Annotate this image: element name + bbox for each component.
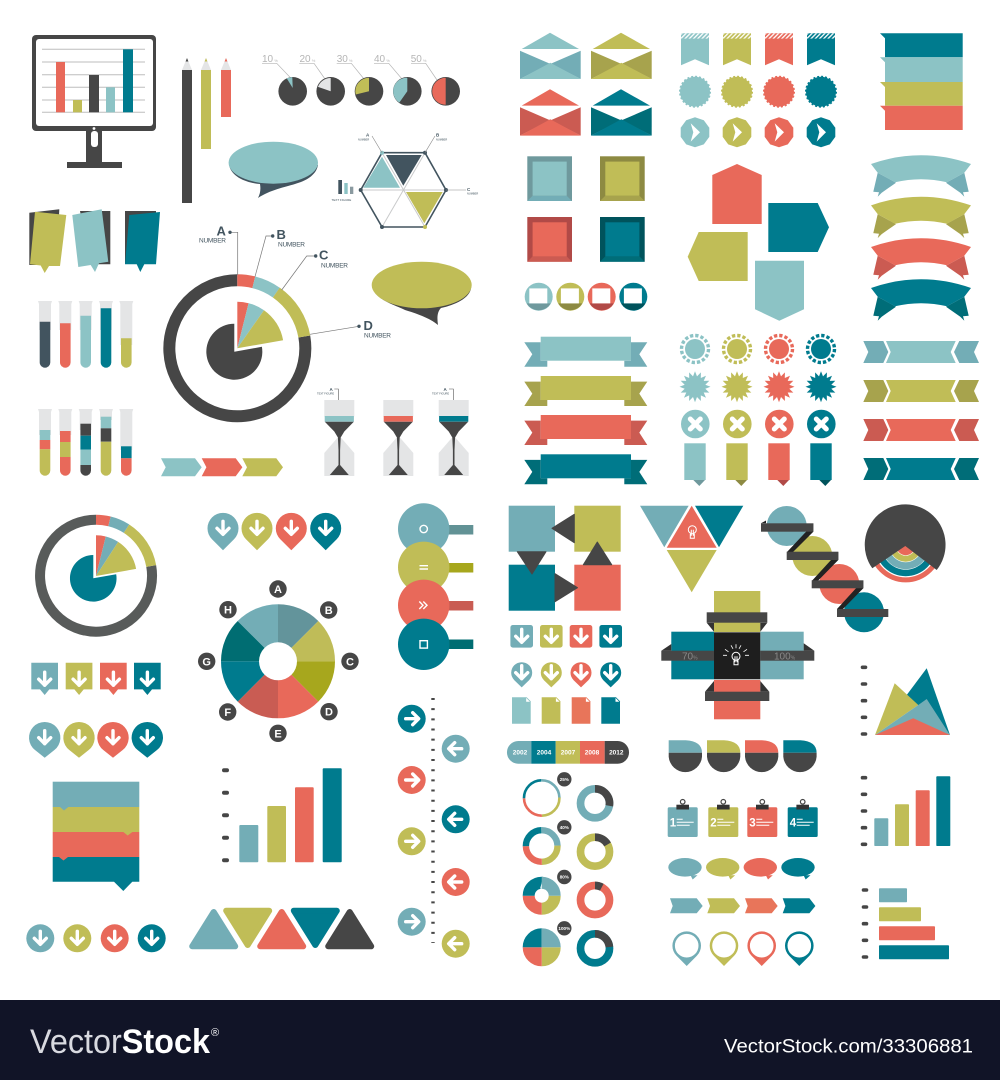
icons: square pins <box>31 663 161 695</box>
text: hourglass labels: TEXT FIGURE <box>317 392 334 396</box>
text: donut labels A to D: NUMBER <box>199 238 226 244</box>
icon: coral pencil <box>221 58 231 117</box>
text: hexagon labels: A <box>366 132 370 138</box>
text: wheel letter badges: C <box>346 656 354 668</box>
chart: percent pies <box>262 54 460 106</box>
icon: mini bars: TEXT FIGURE <box>332 198 351 202</box>
icon: light bulb <box>688 526 696 538</box>
icons: scalloped badges <box>680 76 836 107</box>
icon: olive card <box>29 209 66 273</box>
text: hourglass labels: A <box>444 387 448 392</box>
chart: pencil bars <box>182 58 231 203</box>
chart: thick ring <box>529 883 555 909</box>
text: hexagon labels: NUMBER <box>358 138 369 142</box>
icon: tube 3 <box>79 409 93 476</box>
arrows: chevron row <box>161 458 283 476</box>
icons: flat ribbons <box>524 337 647 484</box>
chart: vertical bar chart right <box>862 776 950 846</box>
icons: small pins <box>511 662 621 687</box>
text: hexagon labels: NUMBER <box>436 138 447 142</box>
chart: mountain triangles <box>862 667 950 735</box>
panel: stepped circles staircase <box>761 506 888 632</box>
icons: overlapping circles with bars <box>398 503 473 670</box>
chart: full pie <box>532 938 551 957</box>
icon: circle with ring <box>398 503 473 555</box>
icon: circle with equals <box>398 542 473 593</box>
text: hexagon labels: B <box>436 132 440 138</box>
text: wheel letter badges: A <box>274 584 282 596</box>
text: hourglass labels: TEXT FIGURE <box>432 392 449 396</box>
chart: teal ring <box>580 934 610 963</box>
icon: teal tube <box>99 301 113 368</box>
icons: flags <box>681 33 835 65</box>
icons: close circles <box>681 410 836 438</box>
icon: bulb with rays <box>723 644 749 665</box>
icons: circles with white squares <box>525 283 647 311</box>
icon: hourglass light teal <box>324 400 354 476</box>
icon: tube 5 <box>119 409 133 476</box>
icon: note cards <box>29 209 160 273</box>
text: percent labels: 50 % <box>411 54 427 65</box>
icons: oval speech bubbles <box>668 858 815 880</box>
panel: dark circle with concentric arches <box>865 504 946 582</box>
icon: timeline arrow teal right <box>398 705 426 733</box>
text: registered mark: ® <box>211 1027 219 1039</box>
chart: vertical bar chart centre <box>224 768 342 862</box>
text: donut labels A to D: NUMBER <box>364 332 391 340</box>
text: percent labels <box>262 54 427 65</box>
icons: ring location pins <box>672 931 814 966</box>
icon: 30 percent pie <box>355 77 383 106</box>
chart: progress rings right column <box>580 789 610 963</box>
text: years <box>513 750 624 757</box>
icon: mini bars <box>332 180 353 202</box>
panel: footer bar <box>0 1000 1000 1080</box>
panel: stacked banner top right <box>880 33 963 130</box>
text: donut labels A to D: NUMBER <box>321 262 348 270</box>
icon: envelope light teal <box>520 33 581 79</box>
icons: numbered clipboards <box>668 800 818 837</box>
text: donut labels A to D: C <box>319 248 329 262</box>
icon: tube 1 <box>38 409 52 476</box>
chart: coral ring <box>580 886 610 914</box>
icon: 40 percent pie <box>393 77 422 106</box>
icons: half-round D shapes <box>669 740 817 772</box>
text: 70 percent: 70% <box>682 652 698 662</box>
icon: hourglass coral <box>383 400 413 476</box>
text: years: 2004 <box>537 750 552 757</box>
icons: numbered clipboards: 3 <box>749 818 756 830</box>
chart: horizontal bar chart <box>864 888 949 959</box>
icon: teal speech bubble <box>229 142 318 198</box>
chart: large donut and exploded pie <box>169 224 391 416</box>
icon: envelope coral <box>520 89 581 136</box>
icon: circle with square <box>398 619 473 670</box>
text: 100 percent: 100% <box>774 652 796 662</box>
icon: navy tube <box>38 301 52 368</box>
icon: tube 4 <box>99 409 113 476</box>
text: wheel letter badges: E <box>274 728 282 740</box>
icons: documents <box>512 697 620 724</box>
text: years: 2012 <box>609 750 624 757</box>
icon: circle with double chevron <box>398 580 473 631</box>
arrows: small chevrons <box>670 898 815 913</box>
panel: four squares with arrows <box>509 506 621 611</box>
icons: bookmarks <box>684 443 832 486</box>
text: percent labels: 40 % <box>374 54 390 65</box>
icons: sun badges <box>682 336 834 362</box>
icon: envelope olive <box>591 33 652 79</box>
text: wheel letter badges: D <box>325 707 333 719</box>
icons: numbered clipboards: 2 <box>710 818 717 830</box>
chart: thin ring <box>524 780 559 816</box>
text: percent badges: 40% <box>560 825 569 830</box>
text: hexagon labels <box>358 132 478 196</box>
chart: test tubes single <box>38 301 133 368</box>
text: years: 2008 <box>585 750 600 757</box>
icon: tube 2 <box>58 409 72 476</box>
chart: small donut and exploded pie <box>40 520 152 632</box>
chart: olive ring <box>580 837 610 866</box>
text: donut labels A to D <box>199 224 391 340</box>
icon: timeline arrow olive right <box>398 827 426 855</box>
text: percent badges: 25% <box>560 777 569 782</box>
icon: timeline arrow light right <box>398 908 426 936</box>
text: wheel letter badges: H <box>224 605 232 617</box>
icon: 10 percent pie <box>278 77 307 106</box>
icons: curved ribbons <box>871 155 971 321</box>
chart: segmented wheel <box>198 580 359 742</box>
icons: bottom arrow circles <box>26 924 166 952</box>
icon: timeline arrow teal left <box>442 805 470 833</box>
icons: small square arrows <box>510 625 622 648</box>
icons: beveled squares <box>527 156 645 262</box>
text: hexagon labels: NUMBER <box>467 192 478 196</box>
chart: timeline with arrows <box>398 698 470 958</box>
icons: polygon arrow badges <box>681 117 835 147</box>
text: VectorStock logo: VectorStock <box>30 1023 210 1061</box>
text: wheel letter badges: B <box>325 605 333 617</box>
text: years: 2002 <box>513 750 528 757</box>
icon: 20 percent pie <box>316 77 345 106</box>
icon: 50 percent pie <box>431 77 460 106</box>
icon: timeline arrow coral left <box>442 868 470 896</box>
icon: teal card <box>125 211 160 272</box>
icons: round pins <box>29 722 163 758</box>
icon: light teal tube <box>79 301 93 368</box>
text: hourglass labels: A <box>330 387 334 392</box>
text: percent badges: 100% <box>558 926 570 931</box>
text: donut labels A to D: B <box>276 227 286 242</box>
text: donut labels A to D: NUMBER <box>278 242 305 248</box>
text: percent labels: 20 % <box>300 54 316 65</box>
text: percent badges <box>557 772 572 936</box>
icons: top teardrop pins <box>208 513 341 550</box>
icon: timeline arrow olive left <box>442 930 470 958</box>
icons: starbursts <box>680 371 836 402</box>
chart: medium ring <box>526 830 558 862</box>
icons: arrow ribbons <box>863 341 979 480</box>
text: wheel letter badges <box>198 580 359 742</box>
text: percent badges: 80% <box>560 875 569 880</box>
text: hourglass labels <box>317 387 449 396</box>
icon: timeline arrow coral right <box>398 766 426 794</box>
icon: envelope teal <box>591 89 652 136</box>
panel: cross diagram with bulb <box>661 591 814 719</box>
text: hexagon labels: C <box>467 187 471 192</box>
chart: computer monitor with bars <box>32 35 156 168</box>
text: image id: VectorStock.com/33306881 <box>724 1037 973 1058</box>
panel: triangle cluster with bulb <box>640 506 743 592</box>
text: wheel letter badges: G <box>202 656 211 668</box>
icons: numbered clipboards: 4 <box>790 818 797 830</box>
text: years: 2007 <box>561 750 576 757</box>
icon: timeline arrow light left <box>442 735 470 763</box>
text: wheel letter badges: F <box>224 707 231 719</box>
chart: rounded triangle row <box>192 911 371 946</box>
icon: hourglass teal <box>439 400 469 476</box>
icon: olive speech bubble <box>372 262 472 325</box>
chart: test tubes stacked <box>38 409 133 476</box>
text: percent labels: 30 % <box>337 54 353 65</box>
icon: olive pencil <box>201 58 211 149</box>
icons: open envelopes <box>520 33 652 136</box>
chart: hourglasses <box>317 387 469 476</box>
panel: four tag shapes <box>688 164 829 321</box>
icon: olive tube <box>119 301 133 368</box>
chart: light teal ring <box>580 789 610 818</box>
text: donut labels A to D: D <box>364 318 373 333</box>
chart: hexagon diagram <box>332 132 478 229</box>
icon: dark pencil <box>182 58 192 203</box>
icon: light teal card <box>72 209 110 272</box>
icons: numbered clipboards: 1 <box>670 818 677 830</box>
chart: quartered rings left column <box>524 780 559 957</box>
text: percent labels: 10 % <box>262 54 278 65</box>
panel: stacked note box <box>53 782 139 891</box>
icon: coral tube <box>58 301 72 368</box>
chart: year timeline pill <box>507 741 629 764</box>
text: donut labels A to D: A <box>216 224 226 238</box>
